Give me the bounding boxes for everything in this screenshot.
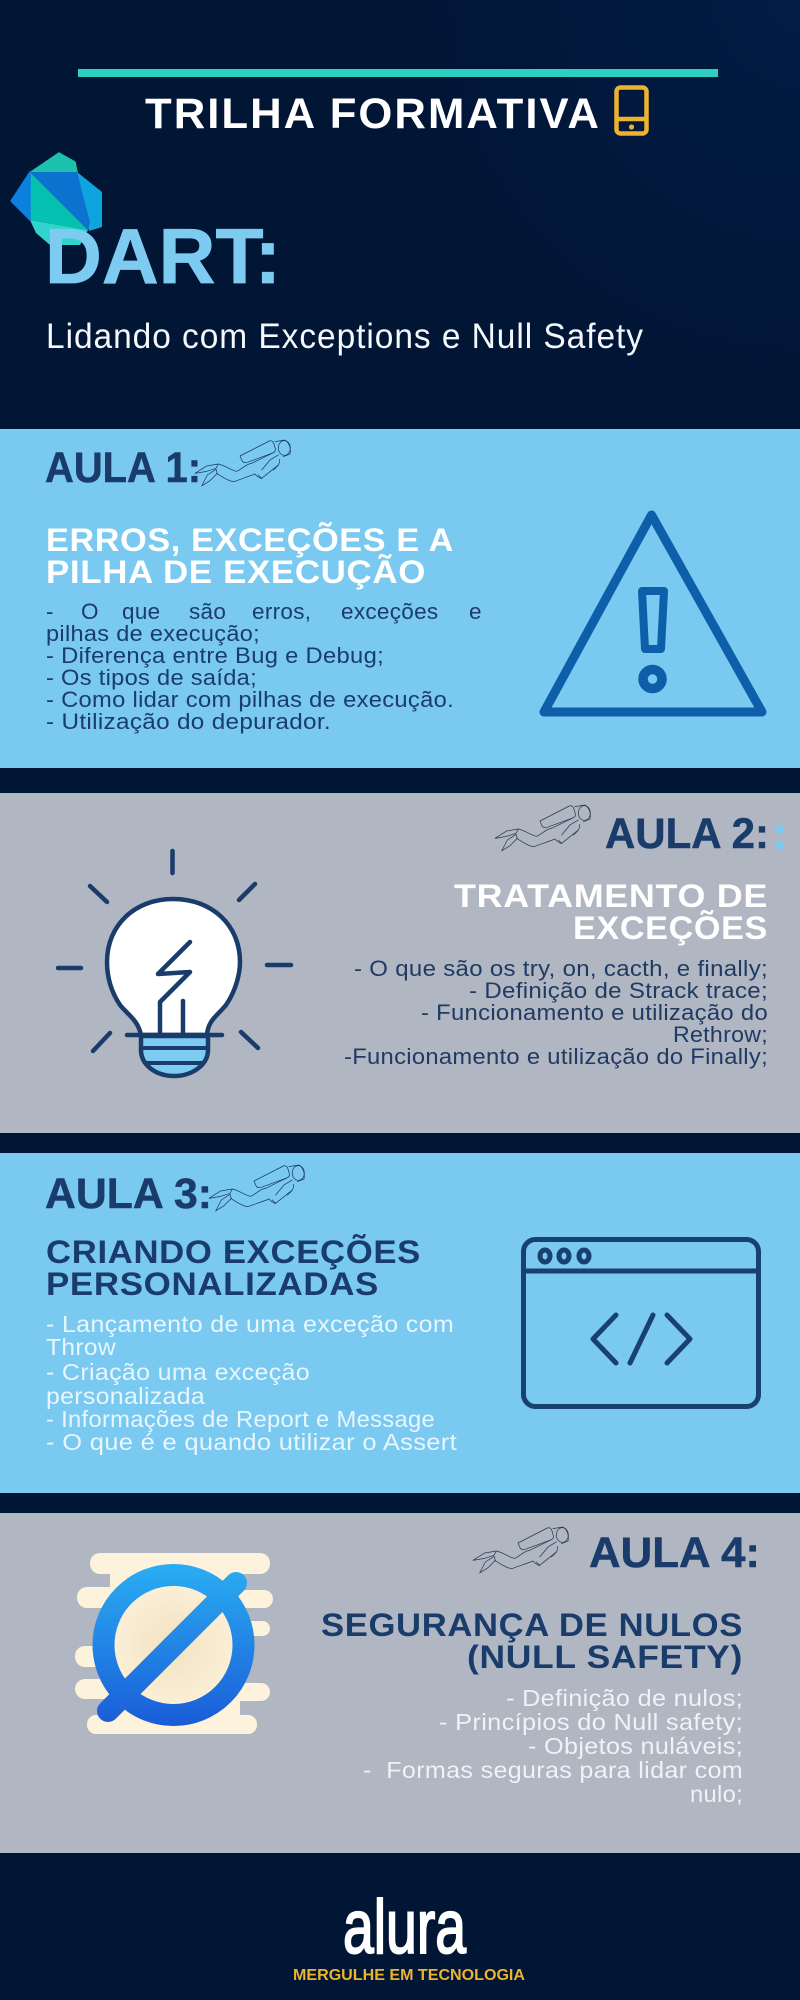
lesson list: - O que são os try, on, cacth, e finally; — [354, 956, 768, 981]
lesson list: - Diferença entre Bug e Debug; — [46, 643, 384, 668]
lesson list: - Formas seguras para lidar com — [363, 1757, 743, 1783]
tagline: MERGULHE EM TECNOLOGIA — [293, 1967, 525, 1984]
accent bar — [78, 69, 718, 77]
icon: light bulb — [58, 851, 291, 1076]
lesson list: exceções — [341, 599, 438, 624]
lesson list: O — [81, 599, 99, 624]
section title: PILHA DE EXECUÇÃO — [46, 554, 426, 590]
icon: diver — [495, 805, 590, 851]
lesson list — [46, 1311, 457, 1455]
icon: warning triangle — [544, 515, 762, 712]
lesson list: são — [189, 599, 226, 624]
heading: aula 4: AULA 4: — [589, 1529, 760, 1577]
section title: PERSONALIZADAS — [46, 1266, 379, 1302]
lesson list: personalizada — [46, 1383, 205, 1409]
panel: aula 2 — [0, 793, 800, 1133]
section title: SEGURANÇA DE NULOS — [321, 1607, 743, 1643]
heading: aula 2: AULA 2: — [605, 810, 769, 858]
lesson list: - Funcionamento e utilização do — [421, 1000, 768, 1025]
icon: code window — [524, 1240, 758, 1406]
icon: null symbol — [75, 1553, 273, 1734]
heading: aula 1: AULA 1: — [45, 444, 201, 492]
lesson list: - Utilização do depurador. — [46, 709, 331, 734]
panel: footer — [293, 1885, 525, 1984]
panel: aula 3 — [0, 1153, 800, 1493]
heading: aula 3: AULA 3: — [45, 1170, 212, 1218]
section title: ERROS, EXCEÇÕES E A — [46, 522, 454, 558]
lesson list: - O que é e quando utilizar o Assert — [46, 1429, 457, 1455]
lesson list — [363, 1685, 743, 1807]
lesson list: erros, — [252, 599, 311, 624]
subtitle: Lidando com Exceptions e Null Safety — [46, 317, 644, 356]
icon: dart logo — [11, 153, 102, 245]
logo: alura: alura — [343, 1885, 467, 1970]
lesson list: - Informações de Report e Message — [46, 1406, 435, 1432]
lesson list: nulo; — [690, 1781, 743, 1807]
lesson list: - Definição de nulos; — [506, 1685, 743, 1711]
panel: aula 1 — [0, 429, 800, 768]
panel: header — [11, 69, 718, 356]
section title: EXCEÇÕES — [573, 910, 768, 946]
section title: CRIANDO EXCEÇÕES — [46, 1234, 421, 1270]
lesson list: - — [46, 599, 54, 624]
icon: diver — [195, 440, 290, 486]
heading: DART: DART: — [45, 212, 281, 300]
lesson list: pilhas de execução; — [46, 621, 260, 646]
lesson list: -Funcionamento e utilização do Finally; — [344, 1044, 768, 1069]
lesson list: - Como lidar com pilhas de execução. — [46, 687, 454, 712]
ghost colon — [776, 824, 784, 850]
lesson list — [46, 599, 482, 734]
lesson list: - Lançamento de uma exceção com — [46, 1311, 454, 1337]
lesson list: - Princípios do Null safety; — [439, 1709, 743, 1735]
lesson list: Rethrow; — [673, 1022, 768, 1047]
lesson list: e — [469, 599, 482, 624]
icon: diver — [473, 1527, 568, 1573]
lesson list: - Os tipos de saída; — [46, 665, 257, 690]
section title — [46, 522, 454, 590]
section title — [454, 878, 768, 946]
section title — [321, 1607, 743, 1675]
title: TRILHA FORMATIVA — [145, 90, 601, 138]
icon: phone — [616, 88, 646, 134]
lesson list: - Objetos nuláveis; — [528, 1733, 743, 1759]
icon: diver — [209, 1165, 304, 1211]
panel: aula 4 — [0, 1513, 800, 1853]
lesson list — [344, 956, 768, 1069]
section title — [46, 1234, 421, 1302]
lesson list: - Definição de Strack trace; — [469, 978, 768, 1003]
lesson list: que — [122, 599, 160, 624]
section title: TRATAMENTO DE — [454, 878, 768, 914]
lesson list: - Criação uma exceção — [46, 1359, 310, 1385]
lesson list: Throw — [46, 1334, 116, 1360]
section title: (NULL SAFETY) — [467, 1639, 743, 1675]
